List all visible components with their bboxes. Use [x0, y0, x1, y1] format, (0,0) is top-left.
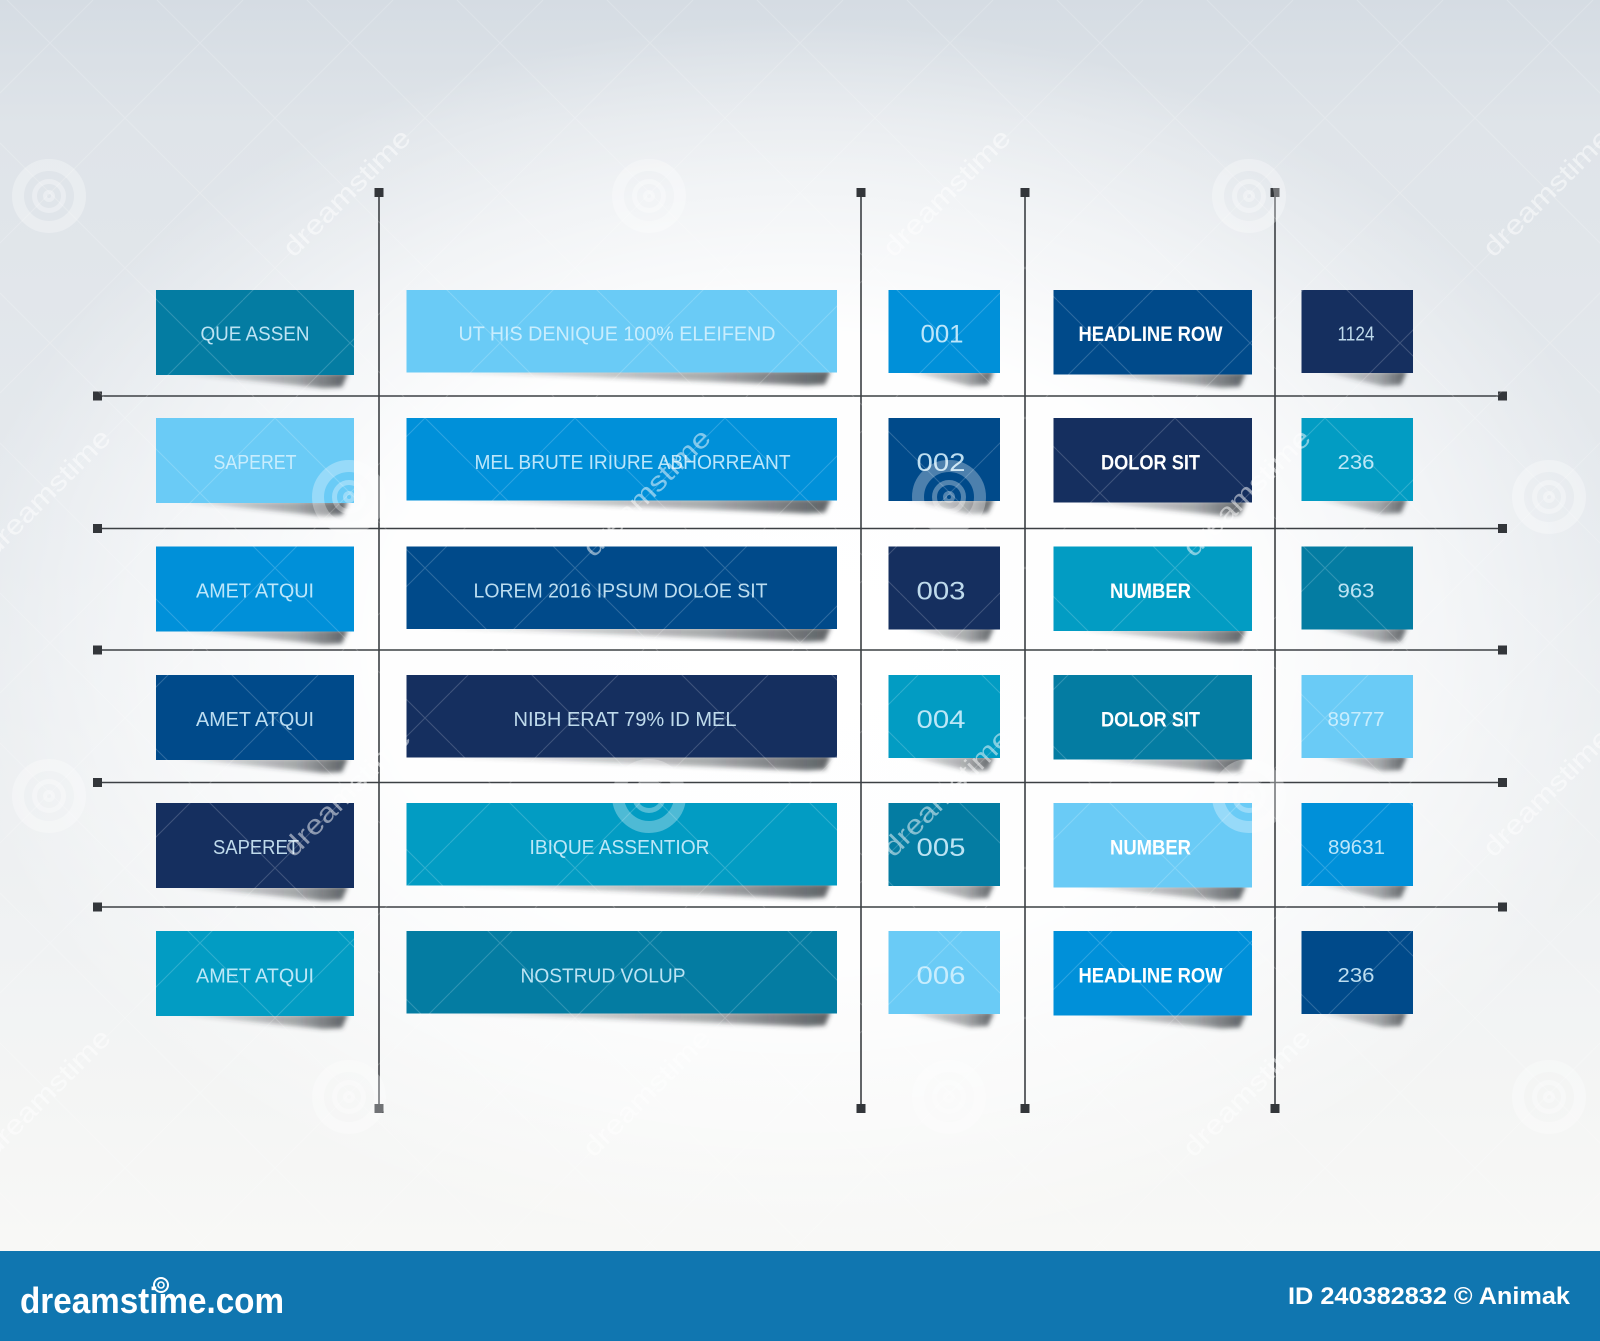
watermark overlay: dreamstime — [1177, 1023, 1317, 1163]
cell: 006: 006 — [916, 962, 966, 990]
cell: ibique assentior — [406, 803, 837, 898]
cell: number — [1054, 546, 1252, 644]
cell: saperet — [156, 803, 354, 901]
watermark overlay: dreamstime — [1177, 423, 1317, 563]
cell: number: NUMBER — [1110, 579, 1191, 603]
cell: 236 — [1302, 931, 1413, 1027]
watermark overlay: dreamstime — [1477, 123, 1600, 263]
cell: 004: 004 — [916, 706, 966, 734]
cell: que assen: QUE ASSEN — [200, 324, 310, 346]
cell: nibh erat — [406, 675, 837, 770]
cell: 236 — [1302, 418, 1413, 514]
cell: 1124 — [1302, 290, 1413, 386]
cell: 236: 236 — [1338, 964, 1374, 987]
cell: ut his denique — [406, 290, 837, 386]
cell: ibique assentior: IBIQUE ASSENTIOR — [530, 837, 710, 859]
cell: amet atqui: AMET ATQUI — [196, 709, 314, 731]
cell: number: NUMBER — [1110, 836, 1191, 860]
table row 1 — [156, 290, 1413, 388]
watermark overlay: dreamstime — [877, 123, 1017, 263]
cell: amet atqui — [156, 931, 354, 1029]
cell: 1124: 1124 — [1338, 323, 1374, 346]
cell: 963 — [1302, 546, 1413, 642]
table row 3 — [156, 546, 1413, 644]
cell: dolor sit: DOLOR SIT — [1101, 451, 1200, 475]
cell: 89777: 89777 — [1328, 708, 1384, 731]
cell: 005 — [888, 803, 1000, 899]
table row 5 — [156, 803, 1413, 901]
cell: 003 — [888, 546, 1000, 642]
cell: nostrud volup — [406, 931, 837, 1026]
cell: 963: 963 — [1338, 580, 1374, 603]
cell: 001: 001 — [920, 320, 964, 348]
cell: dolor sit: DOLOR SIT — [1101, 708, 1200, 732]
cell: amet atqui: AMET ATQUI — [196, 580, 314, 602]
cell: mel brute — [406, 418, 837, 514]
grid lines with square handles — [93, 188, 1507, 1113]
watermark overlay: dreamstime — [577, 1023, 717, 1163]
cell: que assen — [156, 290, 354, 388]
cell: ut his denique: UT HIS DENIQUE 100% ELEIFEND — [458, 324, 776, 346]
watermark overlay: dreamstime — [1477, 723, 1600, 863]
cell: lorem 2016: LOREM 2016 IPSUM DOLOE SIT — [474, 580, 768, 602]
cell: amet atqui — [156, 546, 354, 644]
cell: saperet: SAPERET — [214, 452, 296, 474]
cell: amet atqui: AMET ATQUI — [196, 966, 314, 988]
cell: headline row: HEADLINE ROW — [1078, 322, 1223, 346]
watermark overlay: dreamstime — [277, 723, 417, 863]
footer logo text: dreamstime.com — [20, 1280, 284, 1321]
cell: 003: 003 — [916, 578, 966, 606]
cell: headline row — [1054, 290, 1252, 388]
cell: 005: 005 — [916, 834, 966, 862]
cell: headline row — [1054, 931, 1252, 1028]
icon: logo spiral — [154, 1278, 168, 1292]
cell: 004 — [888, 675, 1000, 771]
cell: dolor sit — [1054, 675, 1252, 772]
table row 4 — [156, 675, 1413, 773]
cell: saperet: SAPERET — [213, 837, 299, 859]
watermark overlay: dreamstime — [577, 423, 717, 563]
footer bar — [0, 1251, 1600, 1341]
cell: headline row: HEADLINE ROW — [1078, 964, 1223, 988]
watermark overlay: dreamstime — [277, 123, 417, 263]
watermark overlay: dreamstime — [877, 723, 1017, 863]
table row 6 — [156, 931, 1413, 1029]
cell: 89777 — [1302, 675, 1413, 771]
cell: number — [1054, 803, 1252, 900]
cell: 89631: 89631 — [1328, 836, 1385, 859]
cell: 002: 002 — [916, 449, 966, 477]
cell: nibh erat: NIBH ERAT 79% ID MEL — [514, 709, 736, 731]
cell: mel brute: MEL BRUTE IRIURE ABHORREANT — [474, 452, 790, 474]
cell: nostrud volup: NOSTRUD VOLUP — [520, 966, 686, 988]
table row 2 — [156, 418, 1413, 516]
cell: 89631 — [1302, 803, 1413, 899]
cell: amet atqui — [156, 675, 354, 773]
cell: 006 — [888, 931, 1000, 1027]
cell: 236: 236 — [1338, 451, 1374, 474]
cell: saperet — [156, 418, 354, 516]
cell: 002 — [888, 418, 1000, 514]
cell: lorem 2016 — [406, 546, 837, 642]
cell: 001 — [888, 290, 1000, 386]
image id and credit: ID 240382832 © Animak — [1288, 1283, 1571, 1310]
cell: dolor sit — [1054, 418, 1252, 516]
